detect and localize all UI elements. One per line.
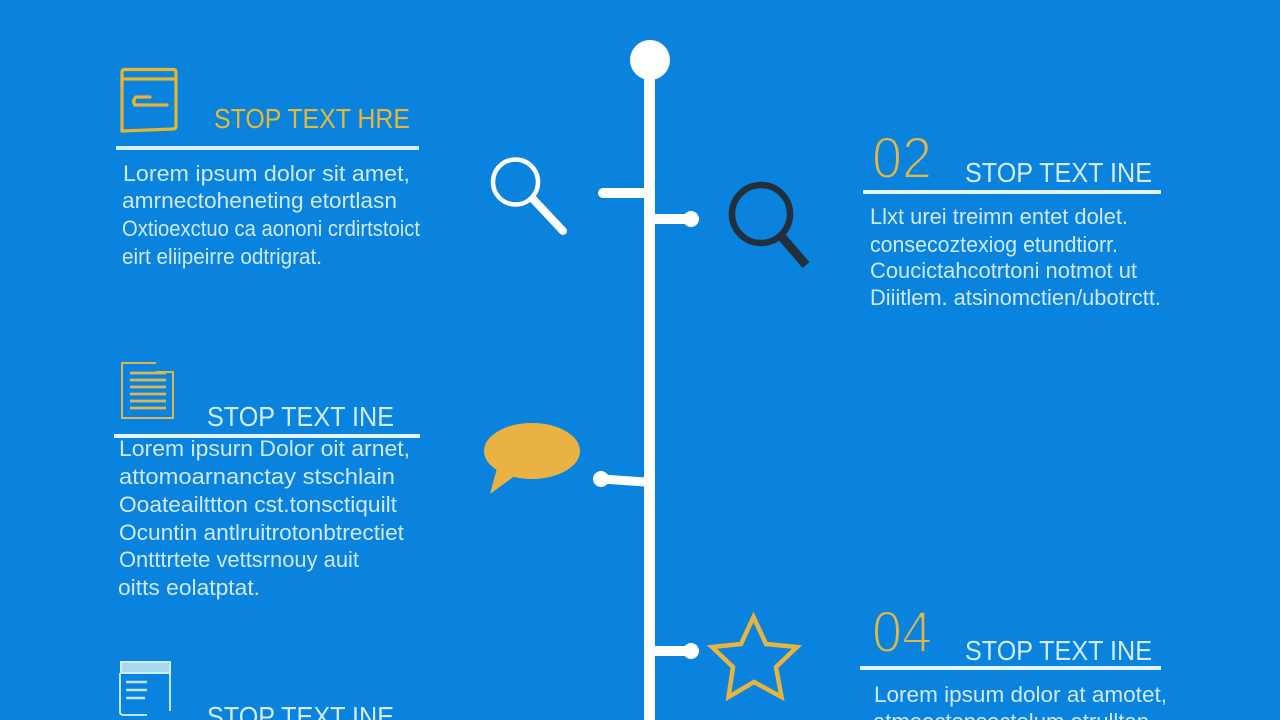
text block: step 1: Lorem ipsum dolor sit amet, <box>123 161 410 186</box>
text block: step 2: Diiitlem. atsinomctien/ubotrctt. <box>870 285 1161 310</box>
panel: step 3 middle left <box>114 363 420 600</box>
icon: white magnifying glass <box>493 160 563 231</box>
icon: blue window <box>120 662 170 715</box>
text block: step 4 <box>873 682 1167 720</box>
heading: step 2: STOP TEXT INE <box>965 157 1152 188</box>
connector: step 1 <box>603 188 645 198</box>
text block: step 1: Oxtioexctuo ca aononi crdirtstoict <box>122 216 420 241</box>
heading: step 1: STOP TEXT HRE <box>214 103 410 134</box>
timeline spine <box>630 40 670 720</box>
panel: step 1 top left <box>116 70 420 269</box>
icon: yellow document <box>122 363 173 418</box>
number: 04: 04 <box>872 600 932 665</box>
text block: step 3: Ocuntin antlruitrotonbtrectiet <box>119 520 404 545</box>
text block: step 3 <box>118 436 410 600</box>
icon: speech bubble <box>484 423 580 494</box>
icon: yellow window <box>122 70 176 131</box>
text block: step 3: Lorem ipsurn Dolor oit arnet, <box>119 436 410 461</box>
divider: step 3 <box>114 434 420 438</box>
connector: step 3 <box>593 471 645 487</box>
text block: step 2: Llxt urei treimn entet dolet. <box>870 204 1128 229</box>
text block: step 2: Coucictahcotrtoni notmot ut <box>870 258 1137 283</box>
text block: step 3: attomoarnanctay stschlain <box>119 464 395 489</box>
text block: step 3: Ontttrtete vettsrnouy auit <box>119 547 359 572</box>
text block: step 1 <box>122 161 420 269</box>
panel: step 4 bottom right <box>860 600 1167 720</box>
icon: dark magnifying glass <box>732 185 806 265</box>
number: 02: 02 <box>872 126 932 191</box>
heading: step 3: STOP TEXT INE <box>207 401 394 432</box>
text block: step 2 <box>870 204 1161 310</box>
heading: step 4: STOP TEXT INE <box>965 635 1152 666</box>
panel: step 5 bottom left <box>120 662 394 720</box>
connector: step 4 <box>654 643 699 659</box>
panel: step 2 top right <box>863 126 1161 310</box>
connector: step 2 <box>654 211 699 227</box>
text block: step 1: amrnectoheneting etortlasn <box>122 188 397 213</box>
text block: step 4: Lorem ipsum dolor at amotet, <box>874 682 1167 707</box>
text block: step 3: Ooateailttton cst.tonsctiquilt <box>119 492 397 517</box>
text block: step 3: oitts eolatptat. <box>118 575 260 600</box>
icon: star <box>712 617 797 697</box>
text block: step 1: eirt eliipeirre odtrigrat. <box>122 244 322 269</box>
text block: step 2: consecoztexiog etundtiorr. <box>870 232 1118 257</box>
divider: step 2 <box>863 190 1161 194</box>
divider: step 1 <box>116 146 419 150</box>
divider: step 4 <box>860 666 1161 670</box>
